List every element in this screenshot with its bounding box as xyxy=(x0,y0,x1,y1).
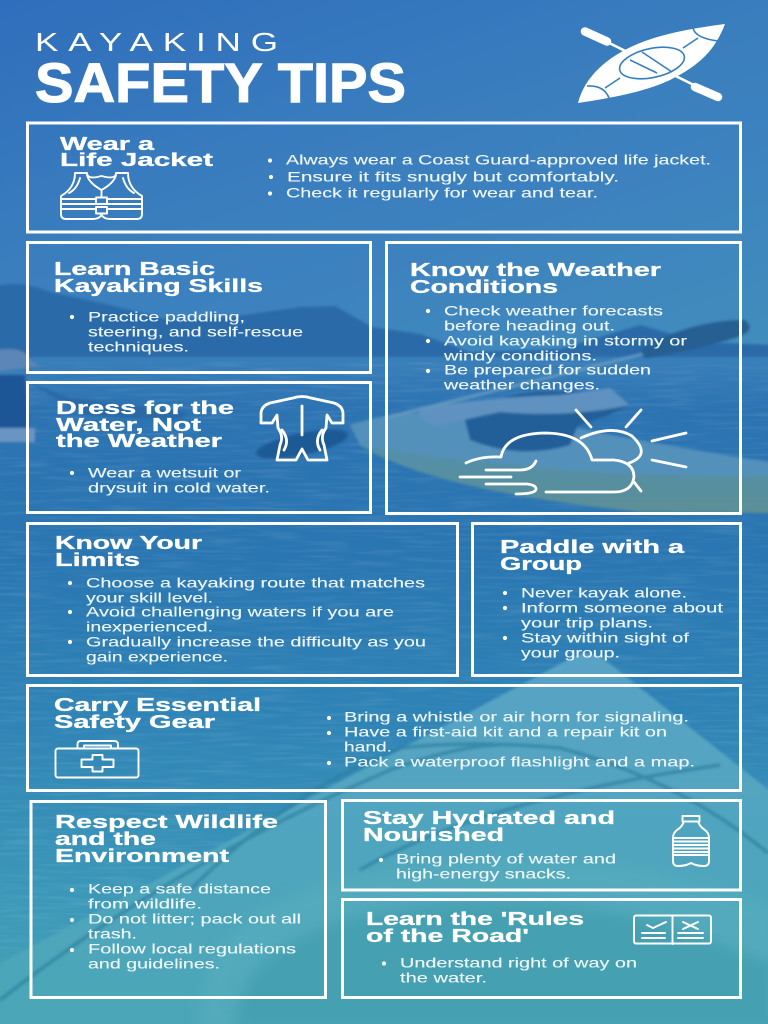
tips: wildlife: Follow local regulations xyxy=(88,942,296,957)
heading: rules: of the Road' xyxy=(366,926,529,946)
tips: limits xyxy=(68,576,426,665)
tips: skills: techniques. xyxy=(88,340,189,355)
tips: life jacket xyxy=(268,153,711,201)
tips: group: your group. xyxy=(521,646,620,661)
heading: rules xyxy=(366,909,584,946)
tips: wildlife: Do not litter; pack out all xyxy=(88,912,301,927)
icon: sun, cloud and wind xyxy=(460,410,686,494)
tips: weather: windy conditions. xyxy=(443,349,597,364)
heading: dress for the water xyxy=(56,398,234,451)
panel: carry essential safety gear xyxy=(28,686,740,790)
tips: dress: Wear a wetsuit or xyxy=(88,466,242,481)
icon: life jacket xyxy=(61,173,142,219)
heading: hydrated: Stay Hydrated and xyxy=(363,808,615,828)
tips: weather: before heading out. xyxy=(444,319,615,334)
panel: dress for the water xyxy=(28,382,370,512)
tips: gear xyxy=(327,710,695,770)
heading: learn basic kayaking skills: Learn Basic xyxy=(54,259,215,279)
panel: know the weather conditions xyxy=(386,242,740,514)
heading: wildlife xyxy=(55,812,278,866)
heading: learn basic kayaking skills xyxy=(54,259,263,296)
tips: limits: Avoid challenging waters if you are xyxy=(86,605,394,620)
tips: rules: the water. xyxy=(400,971,487,986)
tips: gear: Pack a waterproof flashlight and a map. xyxy=(344,755,695,770)
heading: wear a life jacket xyxy=(60,134,213,170)
tips: dress: drysuit in cold water. xyxy=(88,481,270,496)
tips: wildlife xyxy=(70,882,301,972)
tips: skills xyxy=(70,310,303,355)
tips: wildlife: Keep a safe distance xyxy=(88,882,271,897)
tips: group: Stay within sight of xyxy=(521,631,689,646)
panel: learn basic kayaking skills xyxy=(28,242,370,372)
heading: dress for the water: the Weather xyxy=(56,431,222,451)
heading: hydrated: Nourished xyxy=(363,825,504,845)
heading: limits: Limits xyxy=(55,550,140,570)
heading: learn basic kayaking skills: Kayaking Skills xyxy=(54,276,263,296)
tips: group: Inform someone about xyxy=(521,601,723,616)
tips: limits: your skill level. xyxy=(86,591,213,606)
tips: dress xyxy=(70,466,270,496)
heading: weather: Conditions xyxy=(410,277,558,297)
tips: rules xyxy=(382,956,637,986)
icon: kayak and paddle xyxy=(578,24,725,103)
heading: weather xyxy=(410,260,661,297)
heading: group: Group xyxy=(500,554,582,574)
tips: group xyxy=(503,586,723,661)
panel: stay hydrated xyxy=(342,800,740,890)
tips: limits: inexperienced. xyxy=(86,620,213,635)
heading: dress for the water: Water, Not xyxy=(56,415,201,435)
tips: skills: steering, and self-rescue xyxy=(88,325,303,340)
title: SAFETY TIPS xyxy=(35,51,406,114)
tips: life jacket: Ensure it fits snugly but comfortably. xyxy=(287,170,619,185)
panel: wear a life jacket xyxy=(28,123,740,232)
tips: gear: Bring a whistle or air horn for signaling. xyxy=(344,710,689,725)
heading: group: Paddle with a xyxy=(500,537,686,557)
tips: weather: weather changes. xyxy=(443,378,600,393)
title: KAYAKING xyxy=(35,27,278,57)
tips: group: your trip plans. xyxy=(521,616,653,631)
panel: respect wildlife xyxy=(31,802,326,998)
heading: limits xyxy=(55,533,202,570)
heading: wear a life jacket: Wear a xyxy=(60,134,156,154)
tips: gear: hand. xyxy=(344,740,392,755)
icon: first-aid kit xyxy=(56,741,138,778)
heading: gear: Carry Essential xyxy=(54,695,261,715)
panel: rules of the road xyxy=(342,900,740,998)
tips: rules: Understand right of way on xyxy=(400,956,637,971)
heading: wildlife: Respect Wildlife xyxy=(55,812,278,832)
heading: wildlife: Environment xyxy=(55,846,229,866)
panel: paddle with a group xyxy=(472,524,740,676)
heading: hydrated xyxy=(363,808,615,845)
tips: life jacket: Always wear a Coast Guard-approved life jacket. xyxy=(286,153,711,168)
tips: weather xyxy=(426,304,688,393)
tips: wildlife: and guidelines. xyxy=(88,957,220,972)
tips: weather: Avoid kayaking in stormy or xyxy=(444,334,688,349)
tips: limits: Gradually increase the difficulty as you xyxy=(86,635,426,650)
heading: group xyxy=(500,537,686,574)
tips: weather: Be prepared for sudden xyxy=(444,363,651,378)
tips: life jacket: Check it regularly for wear and tear. xyxy=(286,186,598,201)
tips: hydrated: high-energy snacks. xyxy=(396,867,571,882)
heading: rules: Learn the 'Rules xyxy=(366,909,584,929)
tips: hydrated: Bring plenty of water and xyxy=(396,852,616,867)
heading: dress for the water: Dress for the xyxy=(56,398,234,418)
panel: know your limits xyxy=(28,524,458,676)
tips: gear: Have a first-aid kit and a repair kit on xyxy=(344,725,667,740)
heading: gear: Safety Gear xyxy=(54,712,215,732)
tips: group: Never kayak alone. xyxy=(521,586,687,601)
icon: water bottle xyxy=(673,816,709,866)
heading: wear a life jacket: Life Jacket xyxy=(60,150,213,170)
tips: hydrated xyxy=(379,852,616,882)
tips: limits: gain experience. xyxy=(86,650,228,665)
icon: wetsuit xyxy=(261,396,343,460)
heading: limits: Know Your xyxy=(55,533,202,553)
tips: skills: Practice paddling, xyxy=(88,310,245,325)
tips: wildlife: from wildlife. xyxy=(88,897,202,912)
icon: rule book xyxy=(634,916,711,944)
tips: wildlife: trash. xyxy=(88,927,137,942)
tips: weather: Check weather forecasts xyxy=(444,304,663,319)
tips: limits: Choose a kayaking route that matches xyxy=(86,576,425,591)
heading: gear xyxy=(54,695,261,732)
heading: wildlife: and the xyxy=(55,829,156,849)
heading: weather: Know the Weather xyxy=(410,260,661,280)
